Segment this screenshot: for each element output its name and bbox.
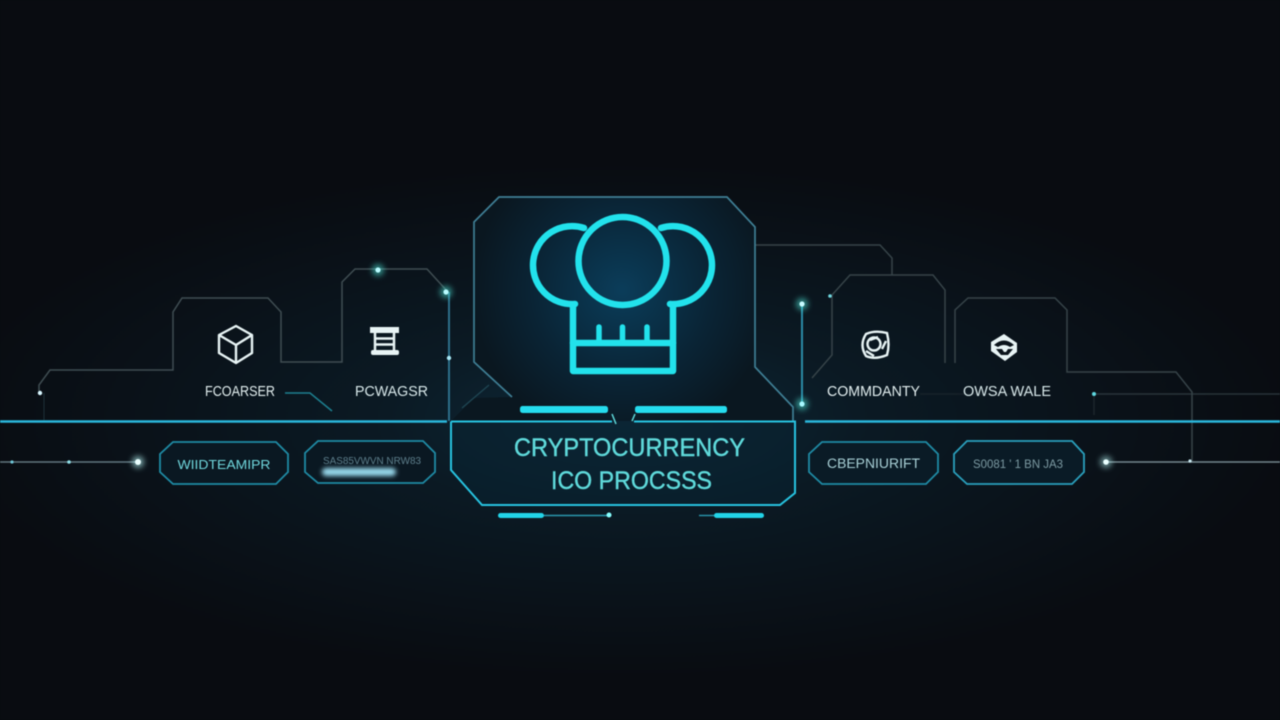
label: community: COMMDANTY	[827, 383, 920, 400]
decorative top bars	[520, 406, 727, 424]
decorative bottom bars	[498, 512, 764, 518]
icon: cube	[219, 326, 252, 363]
button: right two: S0081 ' 1 BN JA3	[973, 457, 1063, 471]
right blue connector	[796, 294, 1280, 468]
icon: wallet face	[991, 334, 1017, 361]
title: ICO PROCSSS	[551, 467, 712, 495]
title	[514, 434, 745, 495]
label: left card one: FCOARSER	[205, 383, 275, 400]
title: CRYPTOCURRENCY	[514, 434, 745, 462]
icon: server stack	[370, 327, 399, 355]
left circuit outline	[39, 269, 448, 420]
icon: chef hat	[533, 217, 712, 371]
button: left one: WIIDTEAMIPR	[178, 457, 270, 472]
button: left one	[160, 442, 288, 484]
panel: central hat panel	[451, 197, 793, 421]
label: left card two: PCWAGSR	[355, 383, 428, 400]
label: wallet: OWSA WALE	[963, 383, 1051, 400]
icon: community	[862, 332, 888, 358]
panel: title box	[451, 421, 795, 505]
button: right one: CBEPNIURIFT	[827, 456, 920, 471]
button: left two	[305, 441, 435, 483]
main horizontal lines	[0, 418, 1280, 424]
left blue connector	[0, 264, 452, 468]
right circuit outline	[755, 245, 1280, 462]
button: left two: SAS85VWVN NRW83	[323, 456, 421, 467]
button: right one	[809, 442, 938, 484]
button: right two	[954, 441, 1084, 484]
